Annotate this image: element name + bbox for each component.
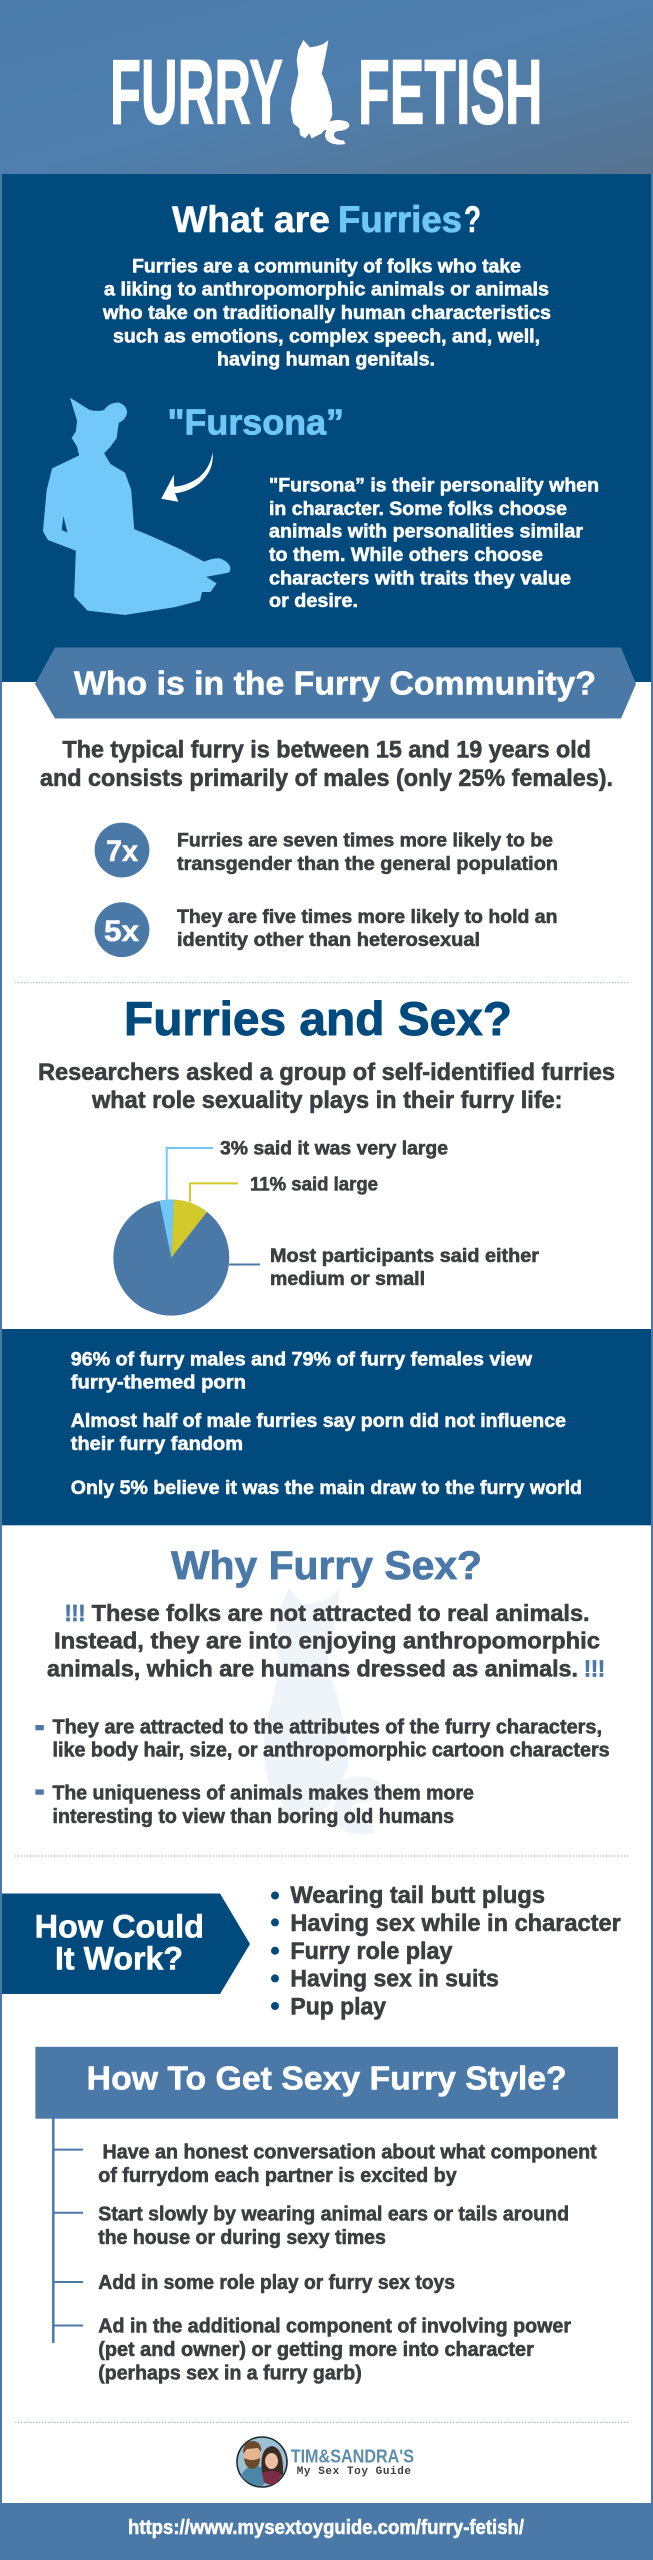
list: how it could work: Wearing tail butt plugs	[290, 1883, 545, 1909]
stat: 5x identity: They are five times more likely to hold an	[177, 906, 558, 928]
callout: 3 percent very large	[167, 1137, 448, 1200]
timeline: steps: of furrydom each partner is excited by	[98, 2165, 458, 2187]
timeline: steps: (pet and owner) or getting more into character	[98, 2339, 534, 2361]
logo: tim and sandra	[237, 2437, 414, 2487]
heading: what are furries: Furries	[338, 199, 462, 240]
stat: 7x transgender: transgender than the general population	[177, 853, 558, 875]
stat: 7x transgender: Furries are seven times more likely to be	[177, 830, 553, 852]
list: attraction reasons: like body hair, size, or anthropomorphic cartoon characters	[52, 1740, 610, 1762]
panel: porn statistics: 96% of furry males and 79% of furry females view	[71, 1349, 533, 1371]
arrow: to figure	[161, 452, 213, 502]
arrow banner: how could it work	[2, 1894, 250, 1994]
arrow banner: how could it work: How Could	[35, 1909, 204, 1945]
text block: not attracted to real animals: !!!	[584, 1655, 605, 1681]
text block: fursona description: or desire.	[269, 591, 358, 612]
arrow banner: how could it work: It Work?	[55, 1941, 183, 1977]
stat: 5x identity: identity other than heterosexual	[177, 929, 480, 951]
callout: 11 percent large: 11% said large	[250, 1173, 378, 1195]
panel: porn statistics: furry-themed porn	[71, 1372, 246, 1394]
heading: furries and sex: Furries and Sex?	[124, 992, 512, 1045]
footer: url: https://www.mysextoyguide.com/furry-fetish/	[128, 2517, 524, 2539]
header: title	[0, 0, 653, 174]
heading: why furry sex: Why Furry Sex?	[171, 1544, 482, 1588]
text block: not attracted to real animals: animals, which are humans dressed as animals.	[47, 1655, 578, 1681]
text block: fursona description: characters with traits they value	[269, 569, 571, 590]
timeline: steps: Ad in the additional component of involving power	[98, 2316, 571, 2338]
callout: medium or small	[229, 1245, 539, 1290]
heading banner: who is in the furry community: Who is in the Furry Community?	[74, 665, 596, 702]
icon: cat silhouette	[291, 40, 349, 145]
list: how it could work	[271, 1883, 621, 2020]
list: attraction reasons	[35, 1716, 610, 1828]
timeline: steps: Have an honest conversation about what component	[102, 2142, 597, 2164]
stat: 7x transgender: 7x	[106, 835, 138, 868]
timeline: steps	[53, 2118, 597, 2384]
pie chart: role of sexuality	[113, 1137, 539, 1316]
callout: 3 percent very large: 3% said it was very large	[220, 1137, 448, 1159]
list: attraction reasons: They are attracted to the attributes of the furry characters,	[52, 1716, 602, 1738]
stat: 5x identity: 5x	[104, 915, 139, 948]
text block: not attracted to real animals: !!!	[65, 1600, 85, 1626]
list: attraction reasons: interesting to view than boring old humans	[52, 1806, 454, 1828]
heading banner: who is in the furry community	[35, 648, 636, 718]
heading: what are furries	[172, 199, 481, 240]
text block: not attracted to real animals: These folks are not attracted to real animals.	[92, 1600, 590, 1626]
stat: 7x transgender	[95, 823, 558, 877]
panel: porn statistics: Almost half of male furries say porn did not influence	[71, 1410, 566, 1432]
text block: not attracted to real animals: Instead, they are into enjoying anthropomorphic	[54, 1628, 600, 1654]
text block: fursona description: to them. While others choose	[269, 545, 543, 566]
text block: fursona description	[269, 475, 599, 612]
header: title: FURRY	[110, 42, 283, 144]
panel: porn statistics: their furry fandom	[71, 1433, 243, 1455]
footer: url	[0, 2503, 653, 2560]
list: attraction reasons: The uniqueness of animals makes them more	[52, 1783, 474, 1805]
text block: typical furry: and consists primarily of males (only 25% females).	[40, 765, 613, 792]
callout: medium or small: Most participants said either	[270, 1245, 539, 1267]
heading: fursona: "Fursona”	[168, 402, 344, 442]
panel: porn statistics	[2, 1329, 651, 1525]
icon: cat watermark	[263, 1588, 383, 1834]
callout: 11 percent large	[190, 1173, 378, 1202]
stat: 5x identity	[95, 902, 557, 957]
heading box: how to get sexy furry style: How To Get Sexy Furry Style?	[87, 2060, 567, 2096]
list: how it could work: Pup play	[290, 1994, 387, 2020]
text block: researchers	[38, 1059, 615, 1114]
timeline: steps: Add in some role play or furry sex toys	[98, 2272, 455, 2294]
text block: researchers: Researchers asked a group of self-identified furries	[38, 1059, 615, 1086]
timeline: steps: Start slowly by wearing animal ears or tails around	[98, 2204, 569, 2226]
text block: fursona description: "Fursona” is their personality when	[269, 475, 599, 496]
text block: typical furry: The typical furry is between 15 and 19 years old	[62, 737, 591, 764]
icon: fursona figure	[43, 398, 230, 615]
heading: what are furries: ?	[464, 199, 481, 240]
text block: definition	[102, 256, 551, 371]
panel: what are furries	[2, 174, 651, 682]
text block: definition: who take on traditionally human characteristics	[102, 303, 551, 324]
list: how it could work: Furry role play	[290, 1939, 453, 1965]
heading: what are furries: What are	[172, 199, 330, 240]
text block: definition: Furries are a community of folks who take	[132, 256, 521, 277]
timeline: steps: (perhaps sex in a furry garb)	[98, 2362, 362, 2384]
text block: not attracted to real animals	[47, 1600, 605, 1681]
logo: tim and sandra: My Sex Toy Guide	[297, 2466, 411, 2478]
text block: fursona description: animals with personalities similar	[269, 522, 584, 543]
text block: definition: a liking to anthropomorphic animals or animals	[104, 280, 549, 301]
text block: fursona description: in character. Some folks choose	[269, 499, 567, 520]
list: how it could work: Having sex while in character	[290, 1911, 621, 1937]
text block: typical furry	[40, 737, 613, 792]
list: how it could work: Having sex in suits	[290, 1967, 499, 1993]
callout: medium or small: medium or small	[270, 1268, 425, 1290]
text block: definition: having human genitals.	[217, 350, 435, 371]
logo: tim and sandra: TIM&SANDRA'S	[291, 2447, 414, 2467]
text block: definition: such as emotions, complex speech, and, well,	[113, 327, 540, 348]
heading box: how to get sexy furry style	[35, 2047, 618, 2119]
timeline: steps: the house or during sexy times	[98, 2227, 386, 2249]
text block: researchers: what role sexuality plays in their furry life:	[91, 1087, 562, 1114]
panel: porn statistics: Only 5% believe it was the main draw to the furry world	[71, 1477, 582, 1499]
